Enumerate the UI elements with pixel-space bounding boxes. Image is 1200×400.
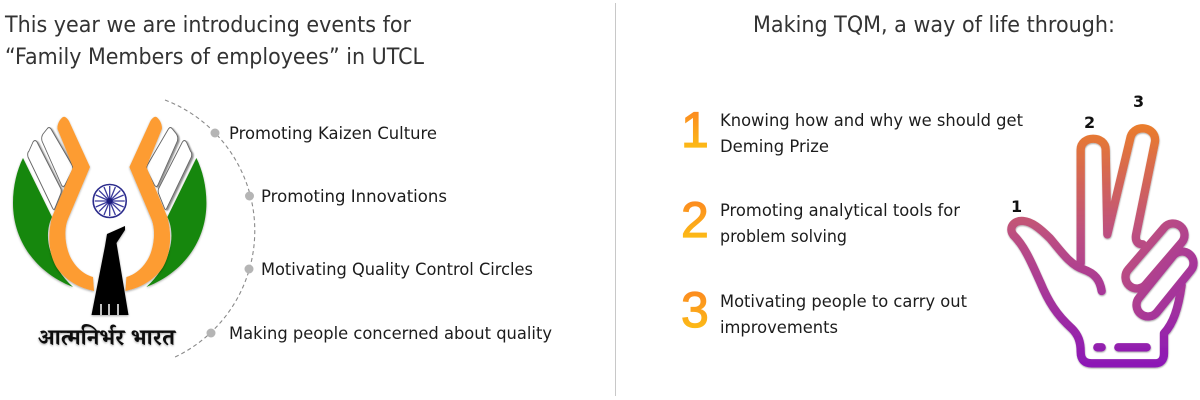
- numbered list: [681, 102, 1023, 338]
- logo orange bands: [49, 117, 170, 291]
- left list: [229, 124, 552, 344]
- left heading: [4, 13, 425, 70]
- logo green wings: [13, 158, 206, 287]
- item 3: Motivating people to carry out: [720, 292, 967, 312]
- logo white feathers: [28, 128, 73, 210]
- item 1: [681, 102, 1023, 158]
- hand finger labels: [1011, 92, 1144, 216]
- logo bird: [92, 226, 128, 315]
- logo: Aatmanirbhar Bharat: [13, 117, 206, 360]
- hand finger labels: 3: [1133, 92, 1144, 111]
- item 1: Deming Prize: [720, 137, 829, 157]
- center divider: [614, 3, 616, 396]
- item 2: Promoting analytical tools for: [720, 201, 960, 221]
- item 1: Knowing how and why we should get: [720, 111, 1023, 131]
- item 1: 1: [681, 102, 709, 158]
- item 3: improvements: [720, 318, 838, 338]
- dashed arc with markers: [165, 100, 255, 358]
- left list: Motivating Quality Control Circles: [261, 260, 533, 280]
- left heading: “Family Members of employees” in UTCL: [5, 45, 425, 70]
- item 2: 2: [681, 192, 709, 248]
- logo chakra: [93, 184, 126, 218]
- logo white feathers right: [147, 128, 192, 210]
- hand finger labels: 1: [1011, 197, 1022, 216]
- right heading: Making TQM, a way of life through:: [753, 13, 1115, 38]
- icon: hand with three fingers: [1011, 128, 1198, 363]
- item 2: problem solving: [720, 227, 847, 247]
- left list: Making people concerned about quality: [229, 324, 552, 344]
- item 3: 3: [681, 282, 709, 338]
- logo hindi wordmark: आत्मनिर्भर भारत: [38, 323, 177, 360]
- left list: Promoting Kaizen Culture: [229, 124, 437, 144]
- item 2: [681, 192, 960, 248]
- left heading: This year we are introducing events for: [4, 13, 412, 38]
- hand finger labels: 2: [1084, 113, 1095, 132]
- item 3: [681, 282, 967, 338]
- left list: Promoting Innovations: [261, 187, 447, 207]
